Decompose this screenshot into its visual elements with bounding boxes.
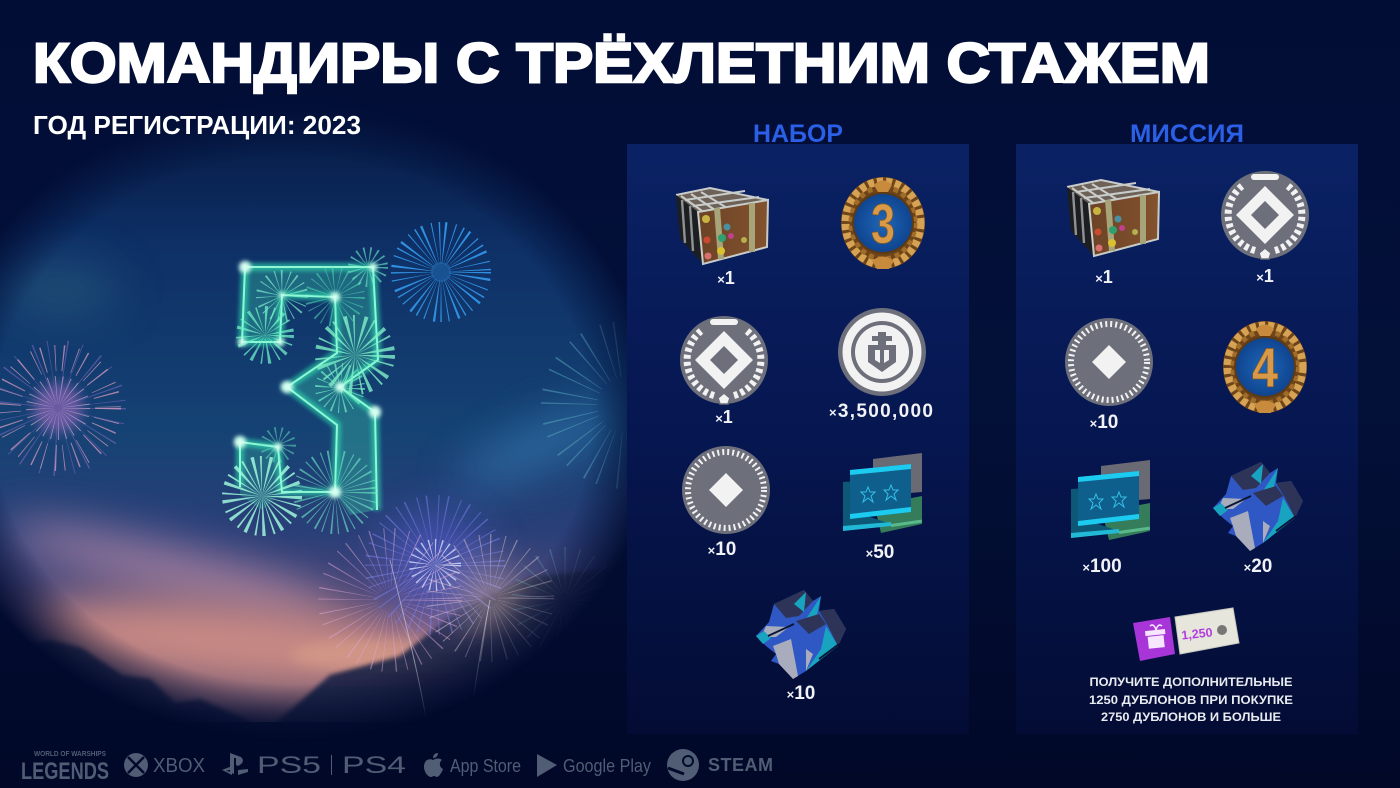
ticket: 1,250 doubloons bbox=[1133, 608, 1239, 661]
fireworks: lower blue and pink bbox=[348, 515, 595, 740]
item: silver emblem x1 bbox=[1221, 171, 1309, 286]
logo: google play: Google Play bbox=[563, 755, 652, 776]
item: diamond disc x10 bbox=[1065, 318, 1153, 433]
logo: world of warships legends bbox=[21, 749, 109, 785]
item: container x1: ×1 bbox=[1095, 267, 1113, 287]
logo: playstation 5 bbox=[222, 752, 321, 779]
panel heading: миссия: МИССИЯ bbox=[1130, 120, 1244, 148]
panel heading: набор: НАБОР bbox=[753, 120, 843, 148]
ticket: 1,250 doubloons: 1,250 bbox=[1181, 625, 1213, 643]
logo: playstation 4 bbox=[331, 752, 406, 779]
logo: xbox bbox=[124, 753, 205, 777]
logo: playstation 4: PS4 bbox=[342, 752, 406, 779]
item: diamond disc x10 bbox=[682, 446, 770, 560]
logo: app store bbox=[424, 753, 521, 777]
item: coin x3,500,000 bbox=[829, 308, 933, 422]
bonus description text bbox=[1089, 675, 1293, 724]
panel: миссия bbox=[1016, 120, 1358, 734]
item: level 4 medal: 4 bbox=[1252, 336, 1278, 399]
item: silver emblem x1: ×1 bbox=[1256, 266, 1274, 286]
item: silver emblem x1: ×1 bbox=[715, 407, 733, 427]
item: wolf camouflage x10 bbox=[756, 590, 846, 704]
item: diamond disc x10: ×10 bbox=[708, 539, 736, 560]
firework: purple left bbox=[8, 358, 108, 458]
mountains bbox=[40, 572, 596, 730]
panel: набор bbox=[627, 120, 969, 734]
bonus description text: 2750 ДУБЛОНОВ И БОЛЬШЕ bbox=[1101, 710, 1281, 724]
logo: world of warships legends: WORLD OF WARSHIPS bbox=[34, 749, 106, 758]
bonus description text: 1250 ДУБЛОНОВ ПРИ ПОКУПКЕ bbox=[1089, 693, 1293, 707]
item: wolf camouflage x20 bbox=[1213, 462, 1303, 577]
item: wolf camouflage x10: ×10 bbox=[787, 683, 815, 704]
firework: teal right edge bbox=[569, 349, 681, 461]
footer platform logos bbox=[21, 749, 774, 785]
item: container x1 bbox=[1067, 180, 1159, 287]
item: container x1 bbox=[676, 188, 768, 288]
panel background bbox=[627, 144, 969, 734]
panel background bbox=[1016, 144, 1358, 734]
logo: playstation 5: PS5 bbox=[257, 752, 321, 779]
item: flags x50 bbox=[843, 453, 922, 563]
logo: google play bbox=[537, 754, 652, 777]
bonus description text: ПОЛУЧИТЕ ДОПОЛНИТЕЛЬНЫЕ bbox=[1090, 675, 1292, 689]
logo: steam bbox=[667, 749, 774, 781]
item: level 3 medal: 3 bbox=[871, 192, 895, 255]
subtitle: registration year: ГОД РЕГИСТРАЦИИ: 2023 bbox=[33, 110, 361, 140]
logo: xbox: XBOX bbox=[153, 755, 205, 777]
logo: steam: STEAM bbox=[708, 755, 774, 775]
title: КОМАНДИРЫ С ТРЁХЛЕТНИМ СТАЖЕМ bbox=[33, 31, 1210, 94]
item: flags x50: ×50 bbox=[866, 542, 894, 563]
background scene: night sky with fireworks and mountains bbox=[0, 129, 627, 722]
firework: blue top right bbox=[412, 243, 470, 301]
item: silver emblem x1 bbox=[680, 316, 768, 427]
item: flags x100: ×100 bbox=[1082, 556, 1122, 577]
item: coin x3,500,000: ×3,500,000 bbox=[829, 401, 933, 422]
item: container x1: ×1 bbox=[717, 268, 735, 288]
glowing number 3 bbox=[234, 257, 381, 516]
logo: app store: App Store bbox=[450, 755, 521, 776]
item: level 3 medal bbox=[841, 177, 925, 269]
logo: world of warships legends: LEGENDS bbox=[21, 758, 109, 785]
item: level 4 medal bbox=[1223, 321, 1307, 413]
item: diamond disc x10: ×10 bbox=[1090, 412, 1118, 433]
item: wolf camouflage x20: ×20 bbox=[1244, 556, 1272, 577]
item: flags x100 bbox=[1071, 460, 1150, 577]
